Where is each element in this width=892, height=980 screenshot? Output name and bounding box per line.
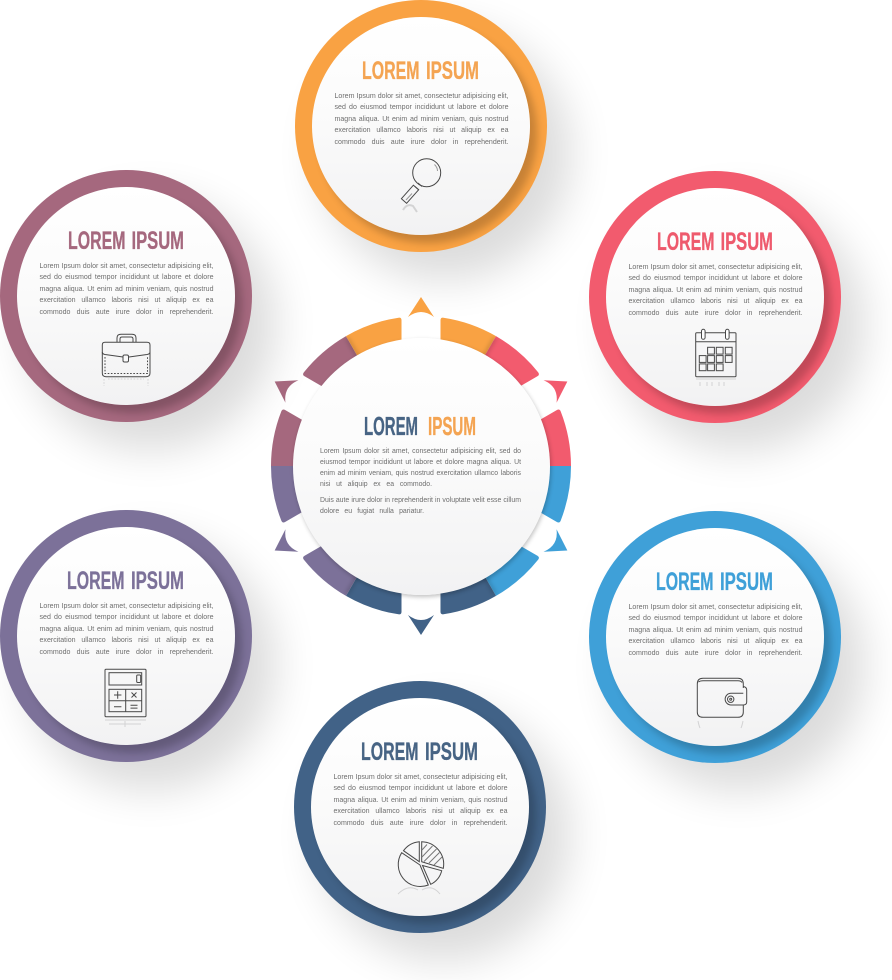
text block: purple [40, 602, 214, 656]
arrow: lower right blue [544, 529, 574, 562]
central text block: eiusmod tempor incididunt ut labore et dolore magna aliqua. Ut [320, 459, 521, 466]
panel: orange circle top [295, 0, 547, 252]
text block: navy: sed do eiusmod tempor incididunt ut labore et dolore [334, 785, 508, 792]
text block: blue: magna aliqua. Ut enim ad minim veniam, quis nostrud [628, 626, 802, 634]
central text block: Duis aute irure dolor in reprehenderit in voluptate velit esse cillum [320, 497, 521, 504]
text block: mauve: exercitation ullamco laboris nisi ut aliquip ex ea [40, 297, 214, 304]
icon: wallet [696, 678, 748, 728]
text block: red: exercitation ullamco laboris nisi ut aliquip ex ea [628, 298, 802, 305]
ring segments [234, 290, 608, 642]
heading: red: LOREM [657, 228, 714, 256]
central text block: Lorem Ipsum dolor sit amet, consectetur adipisicing elit, sed do [320, 448, 521, 455]
panel: blue circle right bottom [589, 511, 841, 763]
panel: navy circle bottom [294, 681, 546, 933]
text block: mauve: magna aliqua. Ut enim ad minim veniam, quis nostrud [40, 286, 214, 292]
arrow: upper left mauve [268, 370, 298, 403]
chart: segmented ring and arrows [271, 297, 571, 635]
text block: orange: commodo duis aute irure dolor in reprehenderit. [334, 138, 508, 146]
text block: navy: commodo duis aute irure dolor in reprehenderit. [334, 820, 508, 826]
text block: red: Lorem Ipsum dolor sit amet, consectetur adipisicing elit, [628, 264, 802, 270]
central text block: nisi ut aliquip ex ea commodo. [320, 481, 432, 488]
text block: mauve: sed do eiusmod tempor incididunt ut labore et dolore [40, 274, 214, 281]
text block: purple: commodo duis aute irure dolor in reprehenderit. [40, 648, 214, 656]
text block: orange: sed do eiusmod tempor incididunt ut labore et dolore [334, 104, 508, 111]
text block: blue: sed do eiusmod tempor incididunt ut labore et dolore [628, 615, 802, 622]
text block: navy [334, 774, 508, 826]
heading: red: IPSUM [720, 228, 773, 256]
arrow: lower left purple [268, 529, 298, 562]
heading: navy: IPSUM [425, 738, 478, 766]
text block: purple: sed do eiusmod tempor incididunt ut labore et dolore [40, 614, 214, 621]
icon: briefcase [102, 334, 150, 386]
text block: orange: exercitation ullamco laboris nisi ut aliquip ex ea [334, 127, 508, 134]
text block: mauve: Lorem Ipsum dolor sit amet, consectetur adipisicing elit, [40, 262, 214, 270]
text block: red: sed do eiusmod tempor incididunt ut labore et dolore [628, 275, 802, 282]
heading: mauve: LOREM [68, 227, 126, 255]
heading: orange: IPSUM [426, 57, 479, 85]
icon: calendar [695, 328, 736, 386]
text block: orange: magna aliqua. Ut enim ad minim veniam, quis nostrud [334, 116, 508, 122]
arrow: top orange [408, 297, 434, 317]
central text block: enim ad minim veniam, quis nostrud exercitation ullamco laboris [320, 470, 521, 477]
heading: navy: LOREM [361, 738, 418, 766]
text block: navy: Lorem Ipsum dolor sit amet, consectetur adipisicing elit, [334, 774, 508, 780]
panel: mauve circle left top [0, 170, 252, 422]
central text block [320, 448, 521, 515]
panel: central ring with arrows [271, 297, 571, 635]
text block: purple: Lorem Ipsum dolor sit amet, consectetur adipisicing elit, [40, 602, 214, 610]
text block: blue: commodo duis aute irure dolor in reprehenderit. [628, 650, 802, 656]
text block: red: commodo duis aute irure dolor in reprehenderit. [628, 310, 802, 316]
heading: blue: IPSUM [720, 568, 773, 596]
heading: purple: IPSUM [131, 567, 184, 595]
text block: purple: magna aliqua. Ut enim ad minim veniam, quis nostrud [40, 626, 214, 632]
text block: blue: Lorem Ipsum dolor sit amet, consectetur adipisicing elit, [628, 604, 802, 610]
icon: pie chart [398, 841, 444, 894]
heading: mauve: IPSUM [132, 227, 184, 255]
text block: navy: exercitation ullamco laboris nisi ut aliquip ex ea [334, 808, 508, 815]
central text block: dolore eu fugiat nulla pariatur. [320, 508, 424, 515]
text block: red: magna aliqua. Ut enim ad minim veniam, quis nostrud [628, 286, 802, 294]
icon: calculator [104, 668, 146, 727]
text block: red [628, 264, 803, 316]
text block: blue: exercitation ullamco laboris nisi ut aliquip ex ea [628, 638, 802, 645]
panel: purple circle left bottom [0, 510, 252, 762]
arrow: upper right red [544, 370, 574, 403]
text block: mauve: commodo duis aute irure dolor in reprehenderit. [40, 308, 214, 316]
heading: purple: LOREM [67, 567, 124, 595]
heading: blue: LOREM [656, 568, 714, 596]
heading: orange: LOREM [362, 57, 420, 85]
central heading: IPSUM [428, 413, 476, 441]
text block: blue [628, 604, 803, 656]
central heading: LOREM [364, 413, 418, 441]
icon: magnifying glass [400, 158, 442, 212]
text block: mauve [40, 262, 214, 316]
central white circle [292, 338, 550, 594]
arrow: bottom navy [408, 615, 434, 635]
text block: navy: magna aliqua. Ut enim ad minim veniam, quis nostrud [334, 796, 508, 804]
panel: red circle right top [589, 171, 841, 423]
text block: purple: exercitation ullamco laboris nisi ut aliquip ex ea [40, 637, 214, 644]
text block: orange [334, 92, 509, 146]
text block: orange: Lorem Ipsum dolor sit amet, consectetur adipisicing elit, [334, 92, 508, 100]
